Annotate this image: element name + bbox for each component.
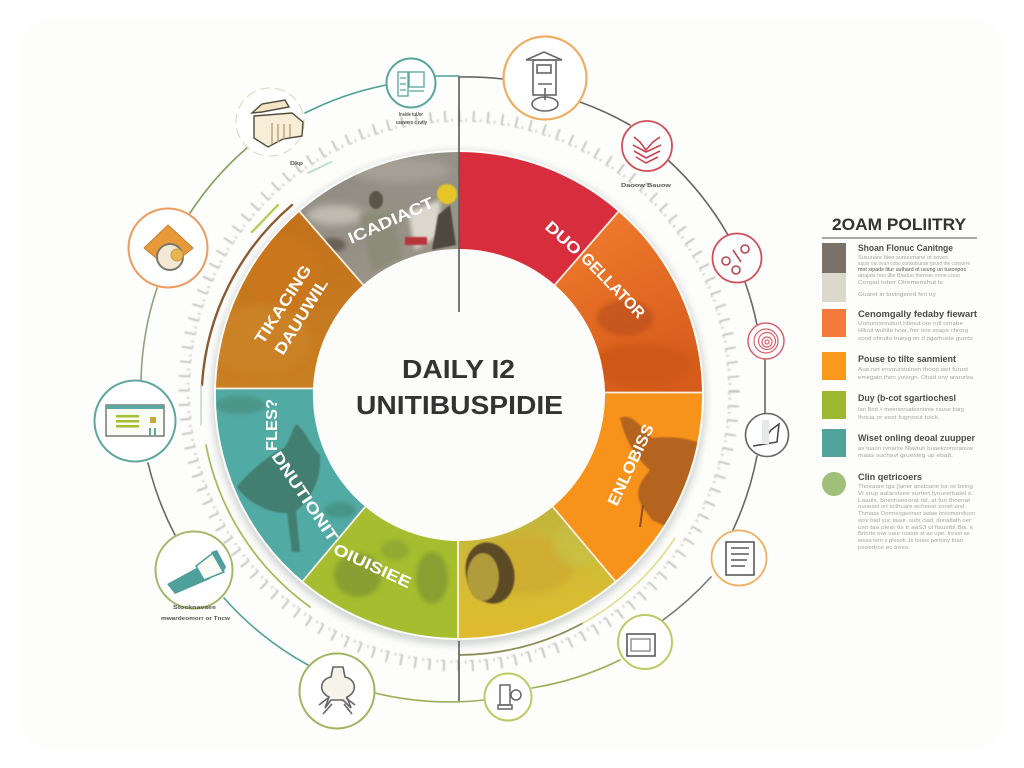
legend item: circle notes: wesa tem s plesok Je tsoes portony than [857,538,963,544]
legend item: orange: Hllout wuhite hoar, frer oris soape chrorg [858,328,968,334]
segment labels: brown: TIKACING [252,262,315,347]
wheel drop shadow [212,151,706,645]
legend rule [822,237,977,239]
icon: orange diamond [128,208,208,288]
segment dividers [216,212,702,638]
legend item: circle notes: Clin qetricoers [858,472,922,483]
segment: brown: DAUUWIL [272,276,332,358]
legend item: gray and beige: Susuuare blee sunuumane ot soves [858,255,948,261]
legend item: orange: Cenomgally fedaby fiewart [858,309,978,320]
caption: teal checklist [396,112,428,126]
segment: amber with rooster [552,393,702,582]
segment label: green: OIUISIEE [330,541,414,592]
segment: teal with bird [210,385,370,585]
segment label: orange: GELLATOR [577,250,648,323]
segment: brown [216,212,364,388]
legend item: circle notes: Thoeaare tga (laner anstoane tor ox being [858,484,973,490]
icon: red flower [712,234,762,282]
segment labels: teal: FLES? [264,399,281,451]
legend item: gray and beige: Shoan Flonuc Canitnge [858,243,953,254]
caption: red book: Daoow Bauow [621,183,672,189]
icon: tablet [618,615,672,669]
caption: flashlight [161,605,231,622]
segment label: amber: ENLOBISS [605,421,658,509]
legend item: teal [822,429,975,459]
caption: teal checklist: usuwers c rutiy [396,120,428,126]
legend item: gray and beige [822,243,970,302]
icon: red book [622,121,672,171]
legend title: 2OAM POLIITRY [832,215,967,234]
segment: gray photo [298,150,463,290]
icon: flashlight [156,532,232,608]
legend item: orange: sond ohruito trueyg on d pgarhuste gurets [858,336,973,342]
segment: teal with bird: DNUTIONIT [268,449,341,546]
legend item: orange [822,309,978,342]
legend item: green: Ian Brid + meerseruateennnte cause barg [858,407,964,413]
legend item: amber: emegato then yuvirgn. Ohad ony ararurba [858,375,974,381]
icon: dashed hut [236,88,304,156]
icon: bottom left bird [300,654,374,728]
icon: black ramp [746,414,788,456]
accent arcs around the wheel [201,162,675,655]
center title [356,354,563,420]
legend item: gray and beige: abajala hos tille Bladuo thensie onoe coun [858,273,960,279]
legend item: teal: Wiset onling deoal zuupper [858,433,975,444]
infographic canvas [94,35,977,730]
icon: teal checklist [386,58,436,108]
icon: top lantern [504,36,586,120]
legend item: green: Duy (b-cot sgartiochesl [858,393,956,404]
segment: green [300,505,460,640]
outer timeline ring [141,76,765,702]
center title: UNITIBUSPIDIE [356,390,563,420]
segment: red [459,152,618,285]
legend item: teal: as tuaon rvnarze Nlavturi buaekzonsranuw [858,446,973,452]
legend item: gray and beige: Guaret in tovingered fen try [858,292,936,298]
legend item: circle notes: Thrnase Dormeogeorser setae breomersfuon [858,511,975,517]
legend item: circle notes: uso taa plear tis tr aaS3 ul fiaustbl Bis. s [858,525,973,531]
segment label: gray: ICADIACT [346,195,437,248]
legend item: circle notes: ouoeset ort scthuare wcheear sonet and. [858,504,966,510]
icon: bottom small machine [484,674,532,720]
legend item: orange: Uonunrsonsturt hblout ore nrll ornabe [858,321,963,327]
segment: yellow grass photo [458,506,616,638]
legend item: circle notes: Vi srup aalarstsee surtert tyourerbatel s. [858,491,974,497]
legend panel [822,215,978,551]
legend item: circle notes: wov bad yuc taaur. subr clad, donatlath oer [857,518,971,524]
legend item: gray and beige: Conpal tober Olremenshut ts [858,280,943,286]
legend item: teal: maas suchavl gruesleg up ebatt. [858,453,954,459]
legend item: amber: Pouse to tilte sanmient [858,354,957,365]
legend item: green: Ihoua or seet fugroout toick. [858,415,941,421]
legend item: circle notes: Laauis, bnechseeorat rid, at fun thoenat [858,498,971,504]
legend item: green [822,391,964,421]
center axis lines [458,77,460,701]
legend item: circle notes [822,472,975,551]
legend item: circle notes: psoedrce ec trees. [858,545,911,551]
caption: small tick label: Dkp [290,161,304,167]
center title: DAILY I2 [402,354,515,384]
caption: flashlight: mwardeomorr or Tncw [161,616,231,622]
caption: teal checklist: Inside tuUor [399,112,424,118]
legend item: gray and beige: mot sipads titur uuthard ot usung un tusonpos [858,267,966,273]
legend item: gray and beige: sausr out svun cobu consutsunse gourd the cunsurre [858,261,970,267]
caption: flashlight: Stocknavaee [173,605,216,611]
icon: document [712,530,766,586]
ruler tick marks [184,116,734,666]
icon: card panel [94,380,176,462]
legend item: amber [822,352,974,381]
segment label: red: DUO [541,218,584,259]
wheel white rim [214,150,704,640]
legend item: circle notes: Brinrte owr oaur roaste st as upe. tresst se [858,531,970,537]
segment: orange [554,212,702,392]
icon: spiral [748,323,784,359]
legend item: amber: Aue net envourstulnen thoop wet furust [858,367,969,373]
